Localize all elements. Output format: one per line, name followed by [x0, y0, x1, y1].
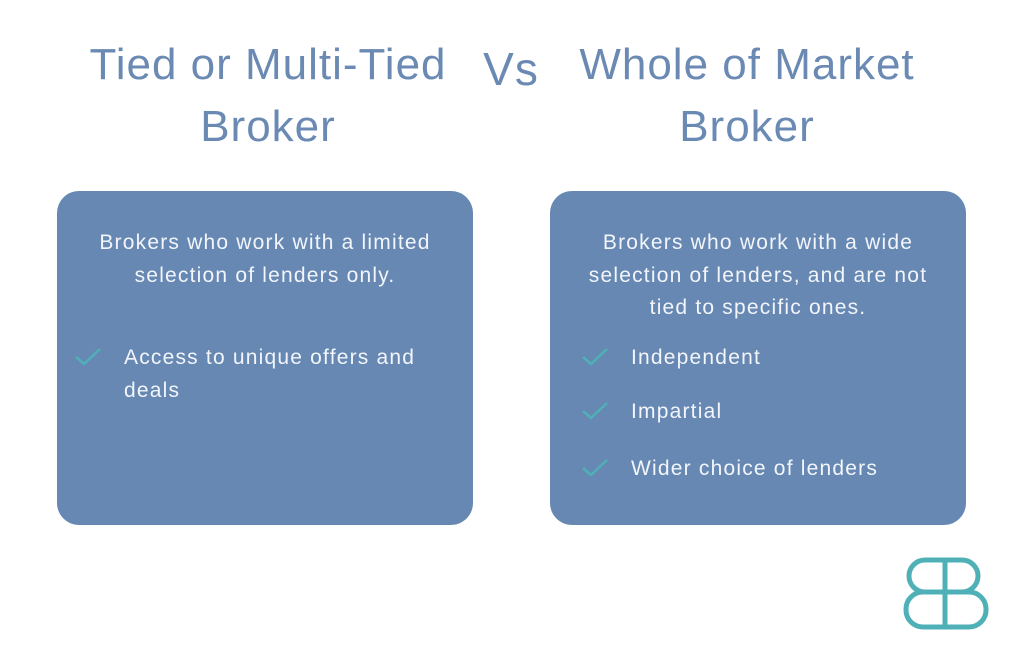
title: left: Tied or Multi-Tied	[89, 40, 447, 89]
description	[99, 231, 431, 286]
title: left: Broker	[200, 102, 336, 151]
description: tied to specific ones.	[650, 296, 866, 319]
title: left	[89, 40, 447, 151]
title: right	[579, 40, 915, 151]
title: right: Whole of Market	[579, 40, 915, 89]
description	[589, 231, 927, 319]
item: impartial	[582, 400, 722, 423]
item: unique offers: deals	[124, 379, 180, 402]
description: selection of lenders, and are not	[589, 264, 927, 286]
panel: whole of market	[550, 191, 966, 525]
item: unique offers: Access to unique offers and	[124, 346, 415, 369]
title: vs: Vs	[483, 43, 539, 95]
item: impartial: Impartial	[631, 400, 722, 423]
description: selection of lenders only.	[135, 264, 395, 286]
description: Brokers who work with a wide	[603, 231, 913, 254]
item: wider choice: Wider choice of lenders	[631, 457, 878, 480]
item: independent: Independent	[631, 346, 761, 369]
logo	[904, 558, 988, 630]
description: Brokers who work with a limited	[99, 231, 431, 254]
title: right: Broker	[679, 102, 815, 151]
panel: tied	[57, 191, 473, 525]
item: unique offers	[75, 346, 415, 402]
